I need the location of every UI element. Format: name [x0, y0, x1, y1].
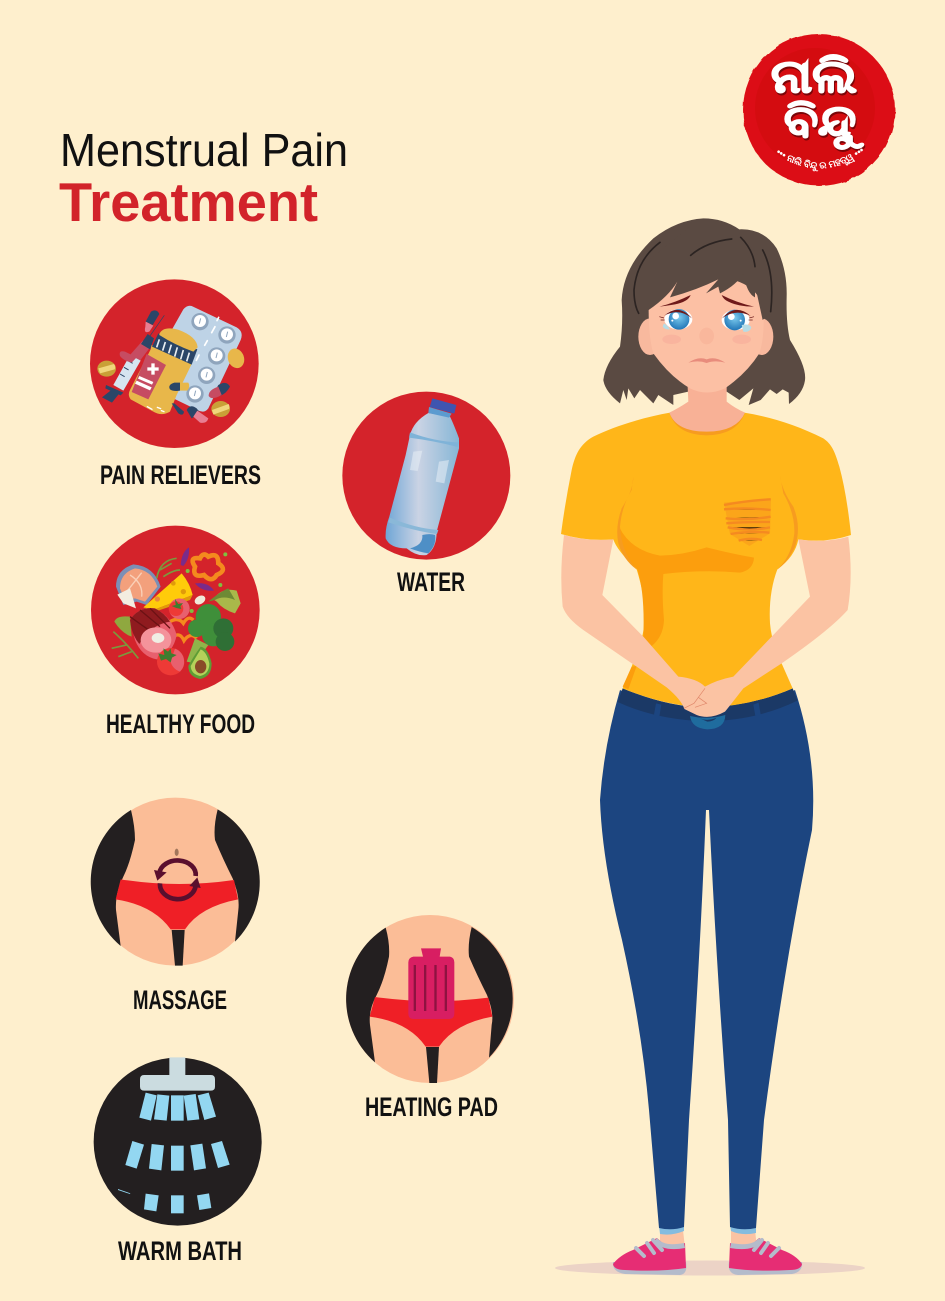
logo: red brush circle: ବିନ୍ଦୁ	[785, 99, 865, 151]
label: water: WATER	[397, 567, 465, 597]
belt	[618, 688, 797, 729]
logo: red brush circle: ନାଲି	[772, 52, 858, 104]
icon: hot water bottle on abdomen	[346, 915, 514, 1083]
title	[59, 124, 348, 233]
head and face	[633, 227, 777, 392]
panel: massage	[91, 798, 260, 1015]
shoes	[613, 1238, 802, 1275]
shirt shading	[619, 527, 754, 646]
bell pepper ring	[193, 555, 223, 579]
panel: water	[342, 392, 510, 597]
shower head	[140, 1057, 215, 1091]
eyebrows	[659, 295, 691, 307]
capsules and tablets	[97, 310, 247, 423]
syringe	[102, 315, 164, 403]
ground shadow	[555, 1260, 865, 1276]
water drops	[118, 1093, 230, 1213]
ankles	[660, 1230, 757, 1248]
panel: heating pad	[346, 915, 514, 1122]
icon: shower	[94, 1057, 262, 1226]
woman figure	[555, 218, 865, 1276]
logo wordmark line 1: ନାଲି	[771, 50, 857, 102]
broccoli	[187, 604, 234, 663]
neck collar	[669, 413, 745, 435]
label: heating pad: HEATING PAD	[365, 1092, 498, 1122]
label: warm bath: WARM BATH	[118, 1236, 242, 1266]
logo tagline: ••• ନାଲି ବିନ୍ଦୁ ର ମହତ୍ତ୍ୱ •••	[777, 148, 863, 172]
bottle cap	[430, 398, 456, 414]
eyes	[659, 309, 754, 332]
neck	[669, 380, 745, 432]
hair bangs	[633, 227, 777, 320]
panel: pain relievers	[90, 279, 261, 490]
blister pack	[157, 306, 242, 412]
bottle body	[386, 413, 459, 555]
hot water bottle	[408, 948, 454, 1019]
panel: warm bath	[94, 1057, 262, 1266]
tomatoes	[157, 648, 184, 675]
icon: water bottle	[342, 392, 510, 560]
pocket	[724, 498, 771, 546]
label: massage: MASSAGE	[133, 985, 227, 1015]
label: pain relievers: PAIN RELIEVERS	[100, 460, 261, 490]
logo wordmark line 2: ବିନ୍ଦୁ	[784, 97, 864, 149]
right shoe	[729, 1262, 802, 1275]
circular arrows	[159, 860, 196, 899]
icon: massage abdomen	[91, 798, 260, 966]
left shoe	[613, 1262, 686, 1275]
dill sprigs	[112, 558, 180, 658]
jeans cuffs	[659, 1225, 756, 1235]
cheese	[143, 573, 193, 609]
avocado	[188, 647, 212, 679]
ham	[130, 608, 177, 659]
hair back	[603, 218, 805, 405]
icon: pills and medicine	[90, 279, 259, 448]
label: healthy food: HEALTHY FOOD	[106, 709, 255, 739]
title line: Menstrual Pain: Menstrual Pain	[60, 124, 348, 176]
parsley	[213, 590, 241, 613]
cheeks	[662, 335, 681, 344]
mouth	[688, 358, 725, 363]
medicine bottle	[129, 328, 198, 414]
hair strands	[634, 237, 772, 313]
arms and hands	[561, 535, 851, 717]
peppers swirl	[170, 618, 197, 641]
logo: red brush circle	[742, 34, 896, 186]
title line: Treatment: Treatment	[59, 171, 318, 233]
jeans	[600, 690, 813, 1229]
torso shirt	[561, 413, 851, 707]
salmon	[116, 564, 161, 605]
icon: food plate	[91, 526, 260, 694]
panel: healthy food	[91, 526, 260, 739]
nose	[699, 328, 714, 344]
